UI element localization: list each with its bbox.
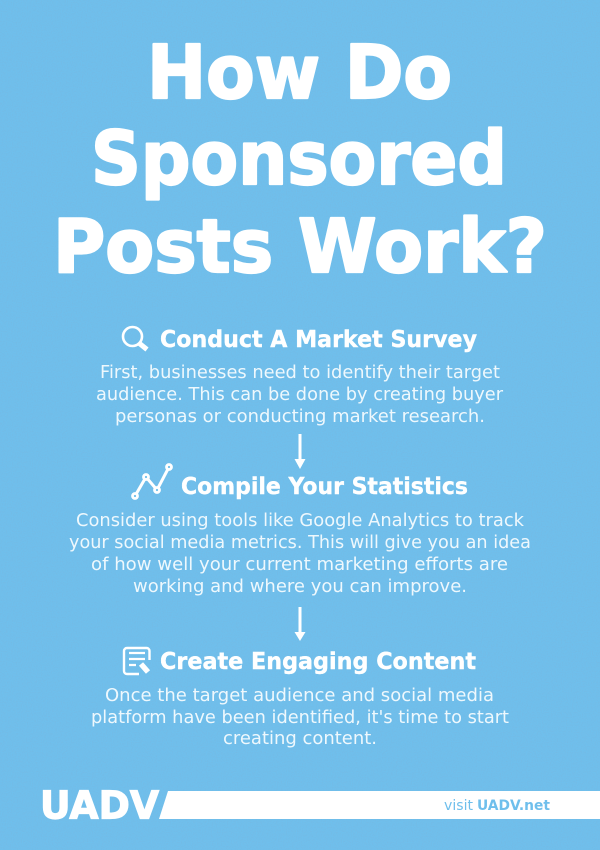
text block: step 3 description: [91, 686, 509, 749]
text block: step 1 description: audience. This can be done by creating buyer: [96, 385, 504, 405]
text block: step 1 description: personas or conducting market research.: [115, 407, 485, 427]
text block: step 3 description: platform have been identified, it's time to start: [91, 708, 509, 728]
arrow: step 2 to step 3: [294, 607, 306, 641]
panel: step 1 market survey: [96, 325, 504, 427]
icon: magnifying glass: [123, 327, 147, 350]
title: Sponsored: [91, 116, 507, 202]
heading: compile your statistics: Compile Your Statistics: [181, 472, 468, 500]
title: Posts Work?: [53, 204, 547, 290]
title: [53, 30, 547, 290]
footer link: [444, 798, 550, 814]
footer: [40, 784, 600, 828]
text block: step 2 description: of how well your current marketing efforts are: [91, 555, 508, 575]
text block: step 2 description: Consider using tools like Google Analytics to track: [76, 511, 525, 531]
text block: step 1 description: [96, 363, 504, 427]
panel: step 3 content: [91, 647, 509, 749]
title: How Do: [147, 30, 452, 116]
text block: step 2 description: your social media metrics. This will give you an idea: [69, 533, 531, 553]
footer link: visit: [444, 798, 474, 814]
panel: step 2 statistics: [69, 464, 531, 597]
heading: conduct a market survey: Conduct A Market Survey: [160, 325, 477, 353]
arrow: step 1 to step 2: [294, 434, 306, 469]
text block: step 3 description: Once the target audience and social media: [105, 686, 494, 706]
footer bar: [159, 791, 600, 819]
text block: step 1 description: First, businesses need to identify their target: [100, 363, 500, 383]
icon: document with pencil: [124, 648, 150, 674]
text block: step 3 description: creating content.: [223, 729, 377, 749]
footer logo: UADV: [40, 784, 160, 828]
text block: step 2 description: [69, 511, 531, 597]
heading: create engaging content: Create Engaging Content: [160, 647, 476, 675]
footer link: UADV.net: [477, 798, 550, 814]
icon: line chart: [132, 464, 172, 498]
text block: step 2 description: working and where you can improve.: [133, 577, 467, 597]
